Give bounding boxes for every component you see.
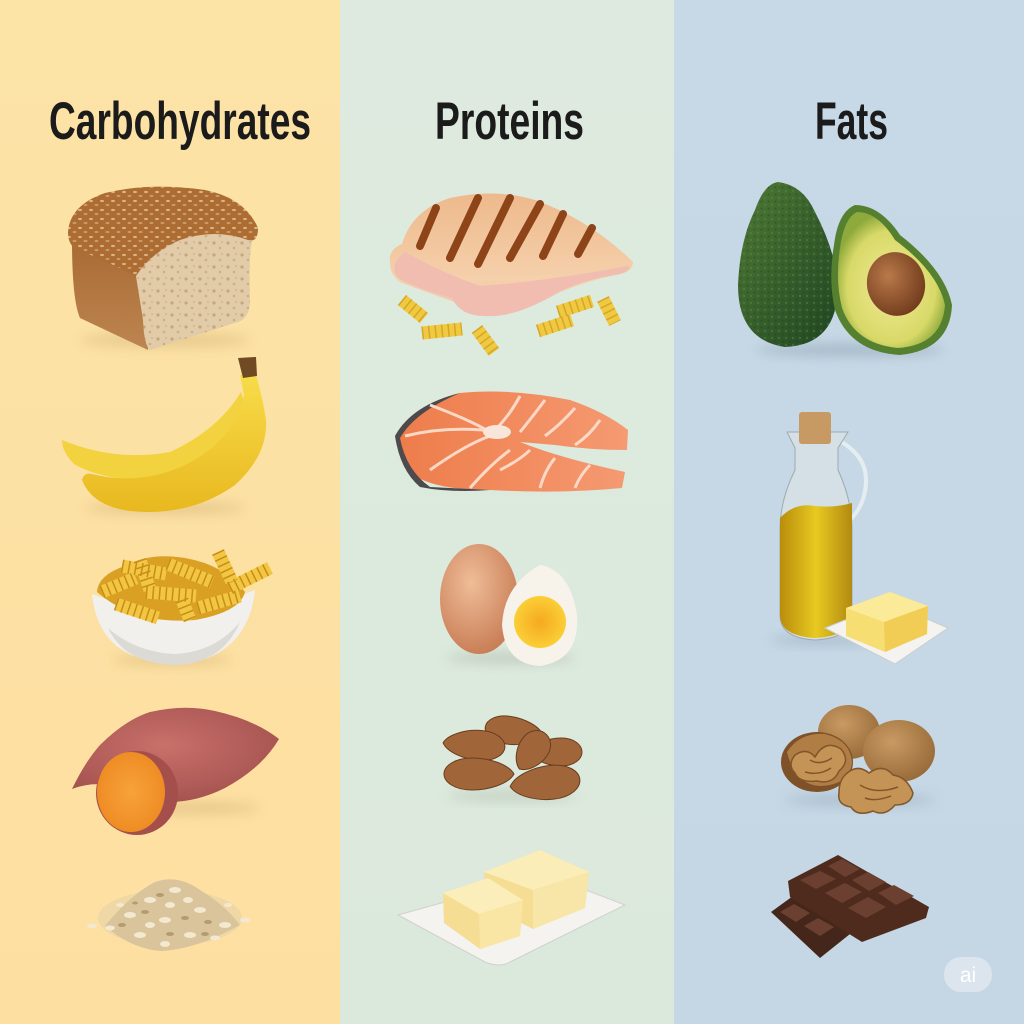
icon: eggs [440, 544, 577, 666]
pasta pieces under chicken [402, 299, 615, 352]
icon: grilled chicken breast [390, 193, 633, 352]
watermark badge [944, 957, 992, 992]
icon: rolled oats [87, 879, 250, 951]
panel: fats background [674, 0, 1024, 1024]
icon: bread loaf [68, 187, 258, 350]
icon: walnuts [781, 705, 935, 813]
icon: sweet potato [72, 708, 279, 835]
heading: Carbohydrates: Carbohydrates [49, 92, 311, 151]
icon: avocado [738, 182, 952, 356]
icon: olive oil bottle [770, 412, 880, 644]
heading: Proteins: Proteins [435, 92, 584, 151]
icon: butter on dish [825, 592, 948, 664]
icon: almonds [442, 713, 582, 804]
icon: salmon steak [395, 392, 628, 492]
panel: carbohydrates background [0, 0, 340, 1024]
icon: bowl of pasta [92, 552, 270, 665]
panel: proteins background [340, 0, 674, 1024]
icon: chocolate bar [771, 855, 929, 958]
heading: Fats: Fats [815, 92, 888, 151]
icon: bananas [62, 357, 266, 514]
icon: butter blocks on plate [398, 850, 625, 965]
watermark badge: ai [960, 964, 976, 987]
